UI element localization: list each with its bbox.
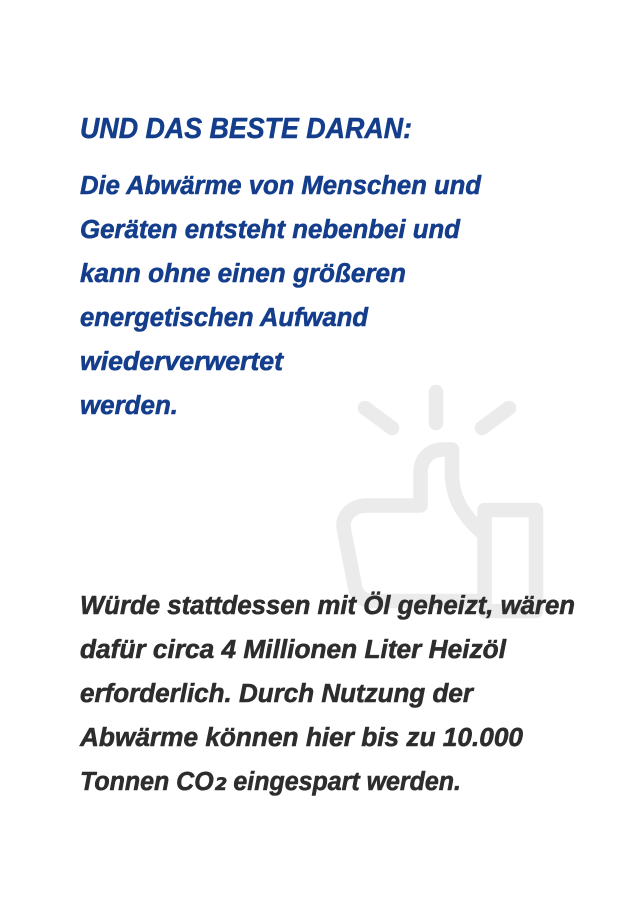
text block: oil and CO2 savings: Würde stattdessen mit Öl geheizt, wären [80,591,575,620]
text block: waste heat statement: werden. [80,392,178,420]
text block: oil and CO2 savings [79,591,575,798]
icon: thumbs up with rays [344,392,536,611]
text block: oil and CO2 savings: erforderlich. Durch Nutzung der [80,680,475,708]
text block: waste heat statement [80,172,482,420]
text block: waste heat statement: Geräten entsteht nebenbei und [80,216,461,244]
text block: waste heat statement: Die Abwärme von Menschen und [80,172,482,200]
text block: oil and CO2 savings: dafür circa 4 Millionen Liter Heizöl [80,636,507,664]
heading: UND DAS BESTE DARAN: [80,113,412,145]
text block: waste heat statement: energetischen Aufwand [80,304,369,332]
text block: waste heat statement: wiederverwertet [80,348,285,376]
text block: waste heat statement: kann ohne einen größeren [80,260,406,288]
text block: oil and CO2 savings: Abwärme können hier bis zu 10.000 [79,724,523,752]
text block: oil and CO2 savings: Tonnen CO₂ eingespart werden. [80,763,461,798]
